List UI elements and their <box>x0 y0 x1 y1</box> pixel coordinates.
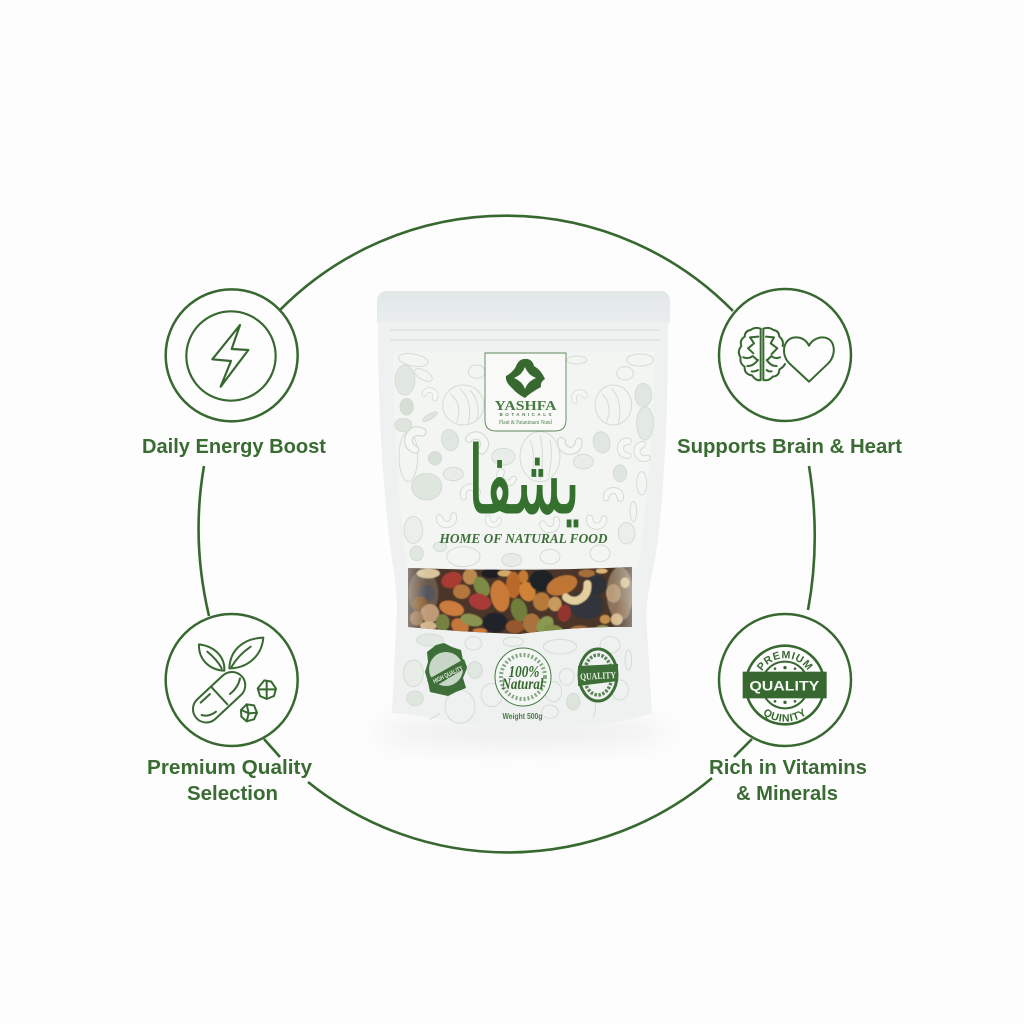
product pouch <box>372 291 672 742</box>
badge: 100% natural: 100% <box>508 662 540 681</box>
badge: 100% natural: Natural <box>501 676 544 693</box>
label line one: Premium Quality <box>147 756 313 779</box>
top seal <box>377 291 670 322</box>
pouch shadow <box>372 722 672 742</box>
logo subline: BOTANICALS <box>500 412 552 417</box>
icon: quality stamp: QUALITY <box>749 678 819 693</box>
icon: lightning bolt <box>166 289 298 421</box>
logo mark <box>506 359 545 398</box>
badge: quality: QUALITY <box>580 671 616 683</box>
logo name: YASHFA <box>494 399 557 414</box>
feature: premium quality selection <box>147 614 313 805</box>
window with mixed nuts <box>405 565 635 637</box>
icon: brain and heart <box>719 289 851 421</box>
printed panel <box>393 352 655 568</box>
badge: high quality: HIGH QUALITY <box>432 665 464 685</box>
logo tagline: Plant & Patanimani Nund <box>499 420 552 426</box>
nut pattern upper <box>395 351 653 567</box>
label: Daily Energy Boost <box>142 435 326 458</box>
badge: quality <box>578 649 618 701</box>
icon: quality stamp: PREMIUM <box>756 650 813 671</box>
badge: 100% natural <box>495 648 551 706</box>
label line two: & Minerals <box>736 782 838 805</box>
icon: capsule and leaves <box>166 614 298 746</box>
label line two: Selection <box>187 782 278 805</box>
tagline: HOME OF NATURAL FOOD <box>439 531 608 546</box>
main connecting ring <box>199 216 815 852</box>
feature: supports brain and heart <box>677 289 902 458</box>
label line one: Rich in Vitamins <box>709 756 867 779</box>
zip lines <box>390 330 660 340</box>
pouch body <box>377 291 670 727</box>
badge: high quality <box>425 643 467 696</box>
icon: quality stamp: QUINITY <box>764 708 804 722</box>
arabic brand name: يشفا <box>468 427 580 536</box>
icon: quality stamp <box>718 612 852 748</box>
feature: rich in vitamins and minerals <box>709 612 867 805</box>
weight label: Weight 500g <box>502 712 543 721</box>
logo box <box>485 353 566 431</box>
label: Supports Brain & Heart <box>677 435 902 458</box>
nut pattern lower <box>403 634 632 723</box>
feature: daily energy boost <box>142 289 326 458</box>
